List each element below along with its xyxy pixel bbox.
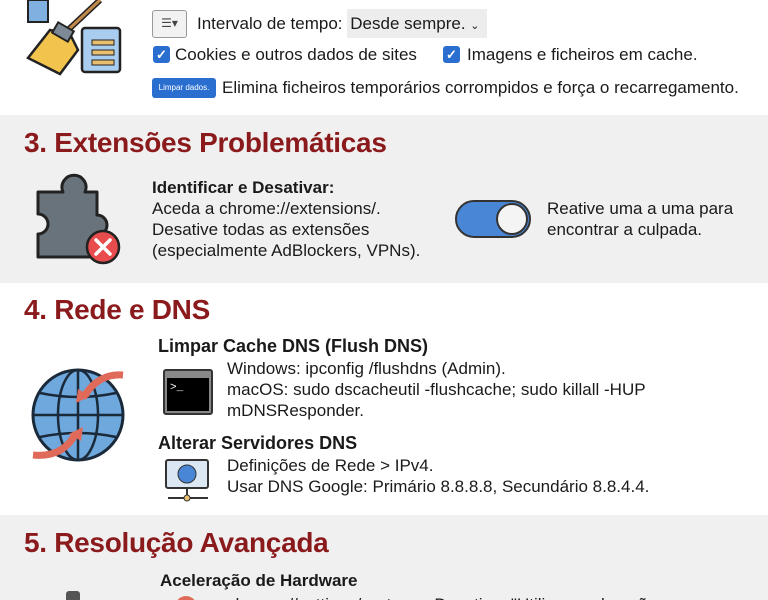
icon: globe [32, 368, 124, 462]
text block: flush dns: mDNSResponder. [227, 401, 364, 420]
text: time range: Intervalo de tempo: Desde sempre. ⌄ [197, 14, 479, 33]
icon: terminal [163, 369, 213, 415]
icon: puzzle with x [36, 174, 120, 264]
dropdown icon [152, 10, 187, 38]
checkbox: cookies: Cookies e outros dados de sites [175, 45, 417, 64]
text block: flush dns: Limpar Cache DNS (Flush DNS) [158, 336, 428, 356]
text: reactivate: encontrar a culpada. [547, 220, 702, 239]
text block: change dns [158, 433, 649, 502]
text block: flush dns [158, 336, 646, 420]
text block: change dns: Alterar Servidores DNS [158, 433, 357, 453]
section 4: network dns [0, 283, 768, 515]
text: identify and disable: (especialmente AdBlockers, VPNs). [152, 241, 420, 260]
text block: change dns: Usar DNS Google: Primário 8.8.8.8, Secundário 8.8.4.4. [227, 477, 649, 496]
icon: toggle [455, 200, 531, 238]
icon: terminal: >_ [170, 382, 183, 394]
heading 4: 4. Rede e DNS [24, 294, 210, 325]
text: hardware acceleration: Aceleração de Hardware [160, 571, 358, 590]
checkbox: images: Imagens e ficheiros em cache. [467, 45, 698, 64]
text block: flush dns: macOS: sudo dscacheutil -flushcache; sudo killall -HUP [227, 380, 646, 399]
icon: network monitor [165, 459, 209, 502]
button + description: Limpar dados. [159, 83, 209, 92]
text: identify and disable: Identificar e Desativar: [152, 178, 334, 197]
text: reactivate: Reative uma a uma para [547, 199, 733, 218]
section 3: extensions [0, 115, 768, 283]
icon: partial device [66, 591, 80, 600]
text: identify and disable [152, 178, 420, 260]
checkbox: images: ✓ [446, 47, 457, 62]
text: reactivate [547, 199, 734, 239]
text block: flush dns: Windows: ipconfig /flushdns (Admin). [227, 359, 506, 378]
section: clear cache (top) [0, 0, 768, 115]
text: identify and disable: Desative todas as extensões [152, 220, 369, 239]
heading 5: 5. Resolução Avançada [24, 527, 328, 558]
checkbox: cookies: ✓ [156, 47, 167, 62]
text: identify and disable: Aceda a chrome://extensions/. [152, 199, 381, 218]
heading 3: 3. Extensões Problemáticas [24, 127, 387, 158]
icon: broom [26, 0, 122, 76]
icon: partial red circle [175, 596, 197, 600]
section 5: advanced [0, 515, 768, 600]
button + description: Elimina ficheiros temporários corrompidos e força o recarregamento. [222, 78, 739, 97]
text block: change dns: Definições de Rede > IPv4. [227, 456, 433, 475]
dropdown icon: ☰▾ [161, 16, 178, 30]
